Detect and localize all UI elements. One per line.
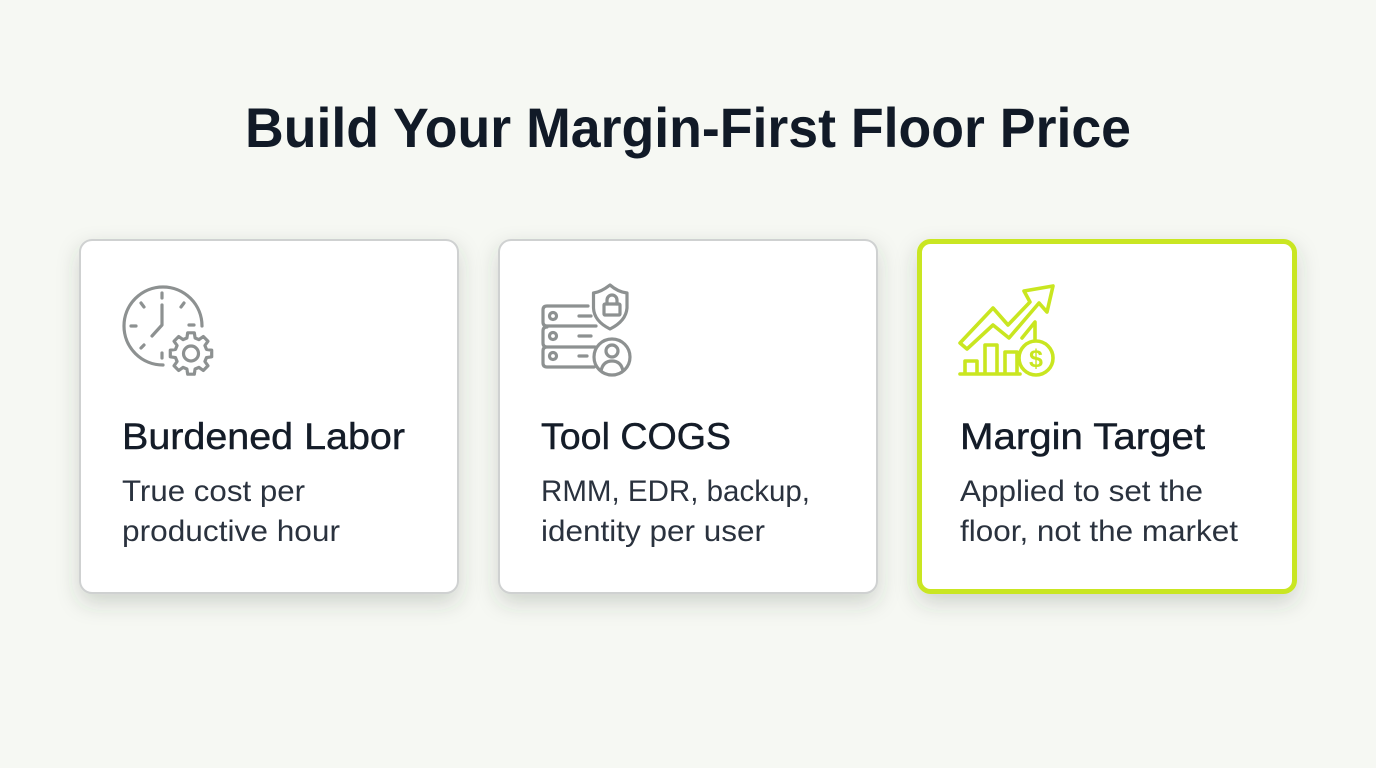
- panel: tool cogs: [499, 240, 877, 593]
- description: tool cogs: RMM, EDR, backup,: [541, 475, 810, 508]
- description: tool cogs: identity per user: [541, 515, 765, 548]
- description: burdened labor: [122, 475, 340, 548]
- icon: growth chart with dollar coin: $: [1029, 345, 1043, 373]
- description: burdened labor: productive hour: [122, 515, 340, 548]
- description: burdened labor: True cost per: [122, 475, 305, 508]
- icon: clock with gear: [124, 287, 212, 374]
- heading: burdened labor: Burdened Labor: [122, 416, 405, 457]
- description: tool cogs: [541, 475, 810, 548]
- description: margin target: Applied to set the: [960, 475, 1203, 508]
- panel: margin target: [920, 242, 1294, 592]
- icon: server, shield and user: [543, 285, 630, 375]
- heading: margin target: Margin Target: [960, 416, 1206, 457]
- panel: burdened labor: [80, 240, 458, 593]
- title: Build Your Margin-First Floor Price: [245, 96, 1131, 159]
- heading: tool cogs: Tool COGS: [541, 416, 731, 457]
- description: margin target: [960, 475, 1239, 548]
- icon: growth chart with dollar coin: [960, 286, 1053, 375]
- description: margin target: floor, not the market: [960, 515, 1239, 548]
